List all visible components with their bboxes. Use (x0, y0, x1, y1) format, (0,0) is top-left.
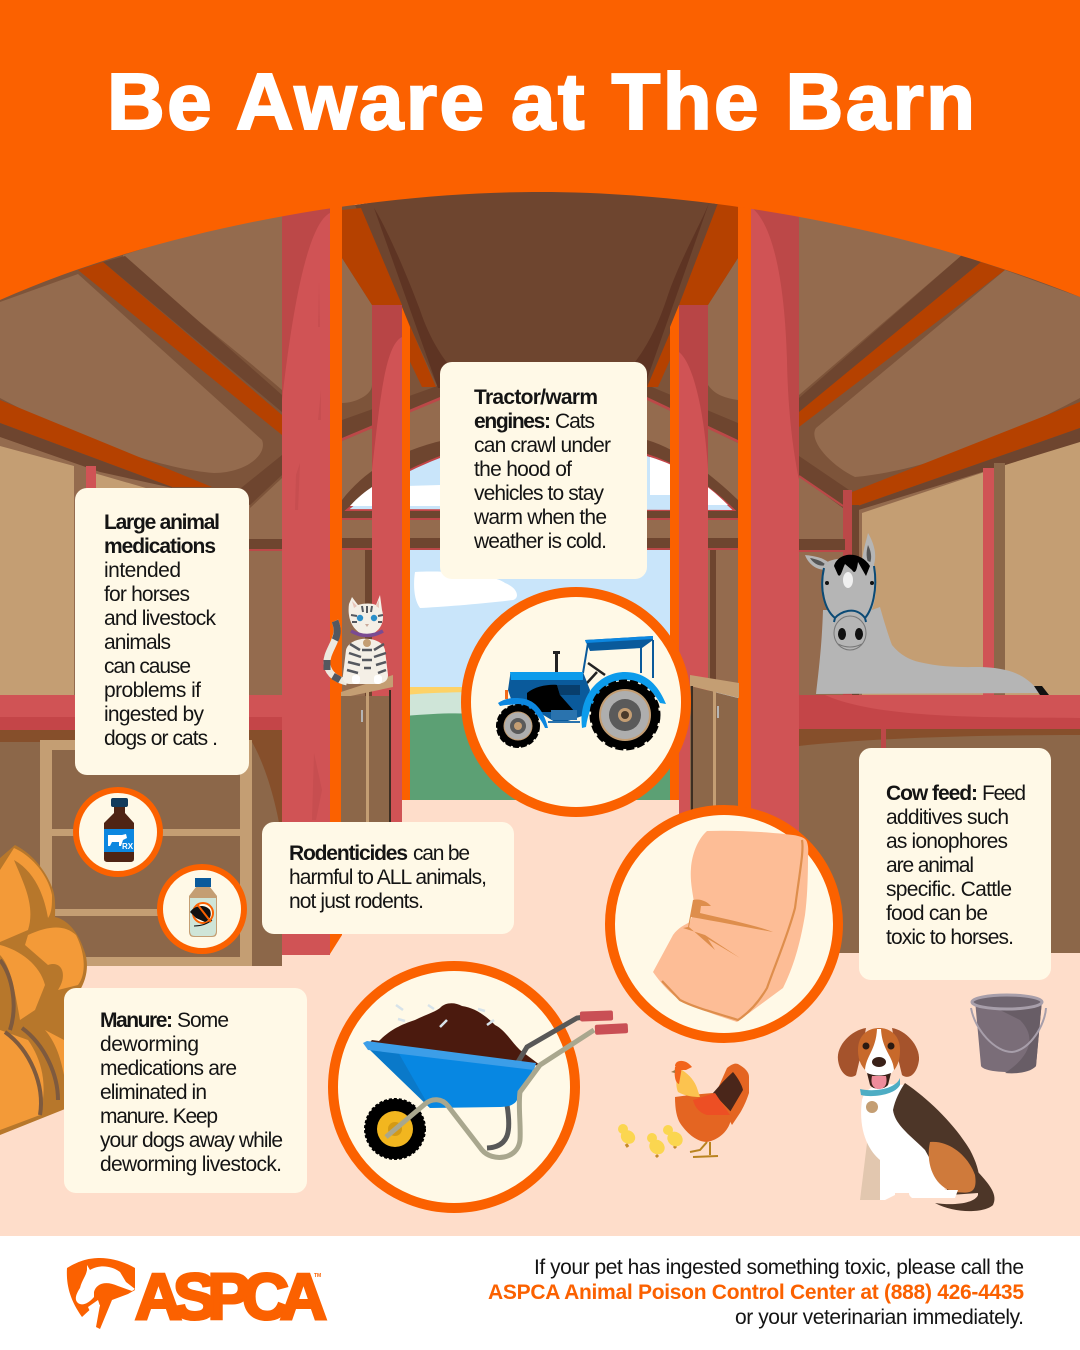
center ceiling (342, 190, 738, 392)
card: large animal medications (75, 488, 249, 775)
footer call to action (488, 1256, 1024, 1329)
card: manure: medications are (100, 1057, 237, 1080)
icon: medication bottle: RX (122, 842, 134, 851)
chicks (618, 1124, 686, 1157)
card: large animal medications: animals (104, 631, 171, 654)
card: tractor and warm engines: engines: (474, 410, 551, 433)
manure pile (367, 1003, 540, 1068)
card: tractor and warm engines (440, 362, 647, 579)
card: cow feed: toxic to horses. (886, 926, 1014, 949)
dog (838, 1028, 995, 1211)
right ceiling and wall (799, 205, 1080, 953)
title: Be Aware at The Barn (107, 57, 975, 146)
card: tractor and warm engines: warm when the (473, 506, 607, 529)
footer call to action: ASPCA Animal Poison Control Center at (888) 426-4435 (488, 1281, 1024, 1304)
card: cow feed: food can be (886, 902, 988, 925)
card: manure: manure. Keep (100, 1105, 218, 1128)
card: cow feed: Feed (982, 782, 1026, 805)
cat illustration (327, 595, 388, 684)
card: large animal medications: can cause (104, 655, 191, 678)
card: rodenticides: Rodenticides (289, 842, 408, 865)
circle: wheelbarrow with manure (333, 966, 628, 1208)
wheelbarrow tray (363, 1041, 536, 1108)
card: manure: Some (177, 1009, 229, 1032)
card: large animal medications: and livestock (104, 607, 216, 630)
right cabinet (690, 675, 739, 810)
icon: medication bottle (76, 790, 160, 874)
card: rodenticides: can be (413, 842, 470, 865)
tractor canopy (583, 636, 653, 683)
inner red posts (372, 305, 708, 830)
card: rodenticides: not just rodents. (289, 890, 424, 913)
card: cow feed: are animal (886, 854, 974, 877)
card: large animal medications: for horses (104, 583, 190, 606)
hay bales (0, 845, 87, 1135)
horse illustration (805, 533, 1049, 695)
tractor front wheel (497, 705, 539, 747)
card: manure: Manure: (100, 1009, 173, 1032)
card: manure: your dogs away while (100, 1129, 283, 1152)
card: large animal medications: medications (104, 535, 216, 558)
right ledge (799, 695, 1080, 729)
card: large animal medications: Large animal (104, 511, 220, 534)
left ceiling and wall (0, 205, 282, 966)
wheelbarrow front handle (386, 1030, 594, 1157)
card: manure: eliminated in (100, 1081, 207, 1104)
logo shield (67, 1258, 135, 1329)
card: rodenticides (262, 822, 514, 934)
circle: tractor illustration (466, 592, 686, 812)
card: tractor and warm engines: can crawl under (474, 434, 611, 457)
large red posts (282, 205, 799, 955)
card: cow feed: Cow feed: (886, 782, 978, 805)
logo wordmark: ASPCA (135, 1260, 327, 1333)
card: large animal medications: intended (104, 559, 181, 582)
card: tractor and warm engines: Tractor/warm (474, 386, 598, 409)
footer logo: ASPCA (67, 1258, 327, 1333)
card: large animal medications: ingested by (104, 703, 204, 726)
card: manure: deworming livestock. (100, 1153, 282, 1176)
tractor body (498, 672, 666, 728)
left cabinet (341, 675, 393, 826)
card: tractor and warm engines: the hood of (474, 458, 572, 481)
card: tractor and warm engines: weather is cold. (473, 530, 607, 553)
card: cow feed: additives such (886, 806, 1009, 829)
card: manure (64, 988, 307, 1193)
wheelbarrow wheel (365, 1099, 425, 1159)
tractor rear wheel (591, 681, 659, 749)
card: manure: deworming (100, 1033, 199, 1056)
header banner (0, 0, 1080, 300)
card: tractor and warm engines: Cats (555, 410, 595, 433)
card: tractor and warm engines: vehicles to stay (474, 482, 604, 505)
card: cow feed: as ionophores (886, 830, 1008, 853)
card: rodenticides: harmful to ALL animals, (289, 866, 487, 889)
back wall under the roof (342, 205, 739, 697)
card: cow feed: specific. Cattle (886, 878, 1012, 901)
rooster (671, 1061, 749, 1157)
card: large animal medications: dogs or cats . (104, 727, 218, 750)
shelf unit (40, 740, 252, 966)
card: large animal medications: problems if (104, 679, 201, 702)
footer call to action: or your veterinarian immediately. (735, 1306, 1024, 1329)
wheelbarrow rear handle (518, 1017, 585, 1062)
view through the barn door: sky and hills (342, 430, 738, 800)
circle: feed sack (610, 810, 838, 1038)
icon: rodenticide bottle (160, 867, 244, 951)
footer logo: ASPCA: TM (314, 1273, 321, 1279)
card: cow feed (859, 748, 1051, 980)
footer call to action: If your pet has ingested something toxic, please call the (534, 1256, 1024, 1279)
bucket (971, 995, 1046, 1073)
